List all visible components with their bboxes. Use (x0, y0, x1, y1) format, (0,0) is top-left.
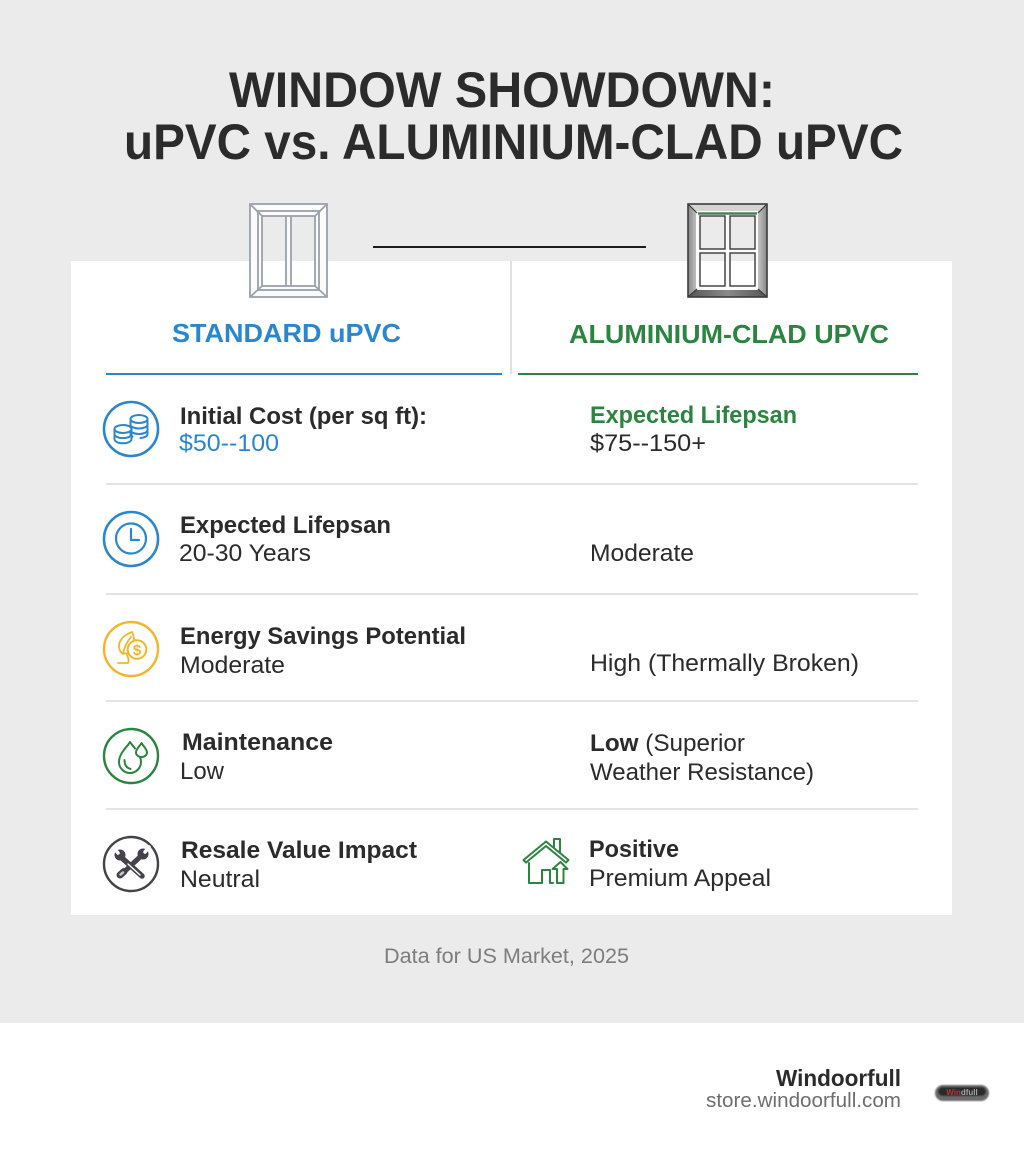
row 4 left text (180, 729, 333, 785)
title: WINDOW SHOWDOWN: (229, 62, 775, 118)
row 4 left text: Maintenance (182, 729, 333, 756)
icon: aluminium-clad window (688, 204, 767, 297)
row 1 right text: Expected Lifepsan (590, 402, 797, 429)
brand logo badge: Windfull (946, 1088, 978, 1097)
icon: clock (104, 512, 158, 566)
data source note: Data for US Market, 2025 (384, 945, 629, 968)
icon: house with arrow (524, 839, 568, 883)
icon: standard uPVC window (250, 204, 327, 297)
row 5 left text (180, 837, 417, 893)
icon: wrench and screwdriver (104, 837, 158, 891)
center divider (510, 261, 512, 374)
heading: aluminium-clad uPVC: ALUMINIUM-CLAD UPVC (569, 319, 889, 349)
heading rule green (518, 373, 918, 375)
row 1 left text: Initial Cost (per sq ft): (180, 403, 427, 430)
comparison panel (71, 261, 952, 915)
brand url: store.windoorfull.com (706, 1090, 901, 1112)
brand name: Windoorfull (776, 1065, 901, 1091)
row 2 right text: Moderate (590, 540, 694, 567)
row 3 left text (180, 623, 466, 679)
row 2 left text (179, 512, 391, 567)
heading: standard uPVC: STANDARD uPVC (172, 318, 401, 348)
row 4 left text: Low (180, 758, 225, 785)
row 3 left text: Moderate (180, 652, 285, 679)
row 1 right text: $75--150+ (590, 430, 706, 457)
icon: water drops (104, 729, 158, 783)
heading rule blue (106, 373, 502, 375)
row 5 right text: Positive (589, 836, 679, 863)
brand logo badge (935, 1085, 989, 1101)
title (124, 62, 903, 170)
icon: coins (104, 402, 158, 456)
row 1 right text (590, 402, 797, 457)
row 4 right text: Low (Superior (590, 730, 745, 757)
footer band (0, 1023, 1024, 1154)
row 1 left text: $50--100 (179, 430, 279, 457)
icon: leaf and dollar (104, 622, 158, 676)
title: uPVC vs. ALUMINIUM-CLAD uPVC (124, 114, 903, 170)
row 5 left text: Resale Value Impact (181, 837, 417, 864)
icon: leaf and dollar: $ (133, 642, 142, 659)
row 5 right text: Premium Appeal (589, 865, 771, 892)
row 2 left text: Expected Lifepsan (180, 512, 391, 539)
row 4 right text: Weather Resistance) (590, 759, 814, 786)
row 5 right text (589, 836, 771, 892)
row 3 left text: Energy Savings Potential (180, 623, 466, 650)
row 4 right text (590, 730, 814, 786)
row 5 left text: Neutral (180, 866, 260, 893)
row 1 left text (179, 403, 427, 457)
row 2 left text: 20-30 Years (179, 540, 311, 567)
row 3 right text: High (Thermally Broken) (590, 650, 859, 677)
top connector line (373, 246, 646, 248)
